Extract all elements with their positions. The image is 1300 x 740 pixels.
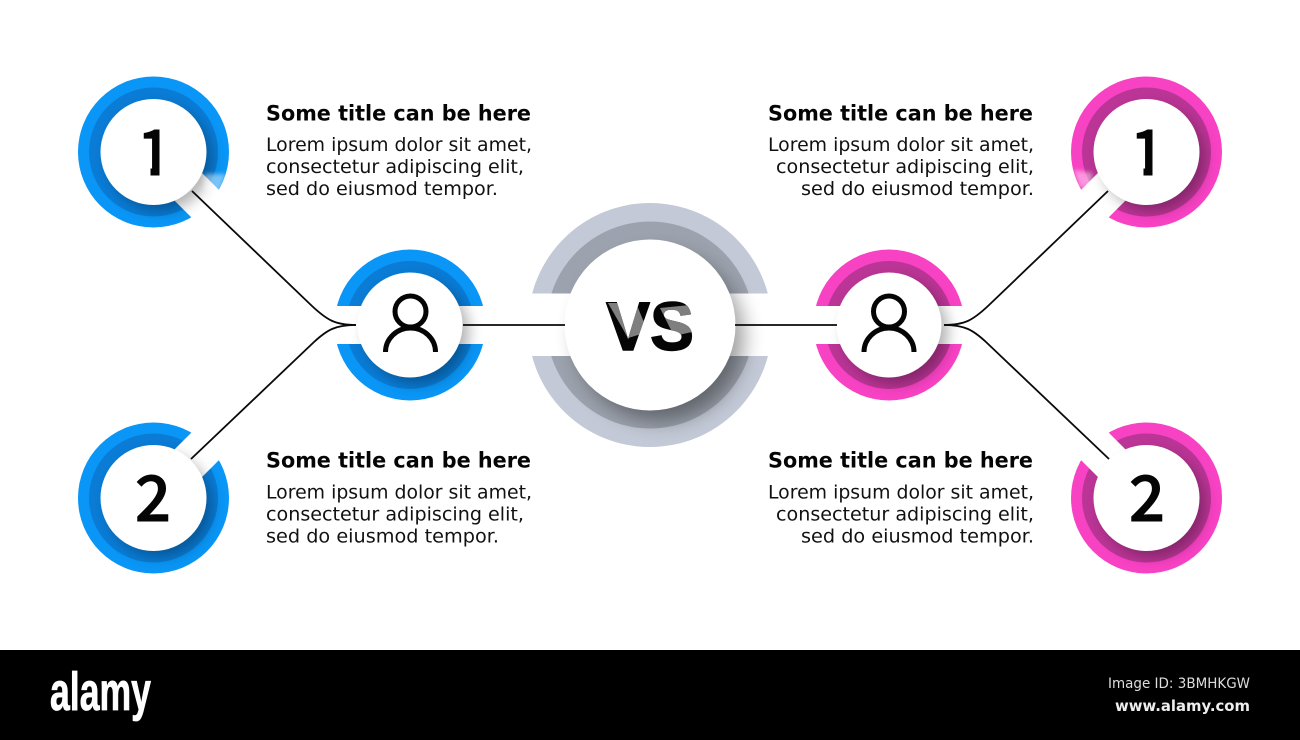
icon: right person [864, 296, 914, 352]
VS badge [520, 203, 780, 447]
right circle 1: 1 [1130, 103, 1166, 194]
text block: left bottom: Lorem ipsum dolor sit amet, [266, 482, 532, 504]
text block: right top: Lorem ipsum dolor sit amet, [768, 134, 1034, 156]
text block: right top: sed do eiusmod tempor. [801, 178, 1034, 200]
left circle 1 [78, 76, 231, 229]
right circle 2: 2 [1129, 449, 1165, 540]
footer bar [0, 650, 1300, 740]
text block: right bottom: consectetur adipiscing elit, [776, 504, 1034, 526]
left person badge [330, 250, 490, 400]
text block: left bottom: consectetur adipiscing elit, [266, 504, 524, 526]
text block: left top [266, 102, 532, 200]
footer logo: alamy [50, 662, 151, 722]
icon: left person [386, 296, 436, 352]
text block: right top: Some title can be here [768, 102, 1033, 126]
VS label [606, 301, 692, 352]
text block: right bottom: sed do eiusmod tempor. [801, 526, 1034, 548]
text block: right bottom [768, 448, 1034, 548]
text block: left bottom: Some title can be here [266, 448, 531, 474]
text block: left bottom [266, 448, 532, 548]
text block: left bottom: sed do eiusmod tempor. [266, 526, 499, 548]
text block: right top [768, 102, 1034, 200]
VS label: VS [606, 288, 694, 365]
text block: right bottom: Some title can be here [768, 448, 1033, 474]
website: www.alamy.com [1115, 697, 1250, 715]
left circle 1: 1 [137, 103, 173, 194]
connector lines [191, 191, 1109, 459]
left circle 2 [78, 421, 231, 574]
left circle 2: 2 [135, 449, 171, 540]
text block: left top: sed do eiusmod tempor. [266, 178, 498, 200]
right person badge [809, 250, 969, 400]
image id: Image ID: 3BMHKGW [1108, 676, 1250, 692]
text block: right top: consectetur adipiscing elit, [776, 156, 1034, 178]
text block: left top: Some title can be here [266, 102, 531, 126]
right circle 2 [1069, 421, 1222, 574]
text block: left top: consectetur adipiscing elit, [266, 156, 524, 178]
text block: left top: Lorem ipsum dolor sit amet, [266, 134, 532, 156]
right circle 1 [1069, 76, 1222, 229]
text block: right bottom: Lorem ipsum dolor sit amet, [768, 482, 1034, 504]
VS label: VS [606, 288, 694, 365]
